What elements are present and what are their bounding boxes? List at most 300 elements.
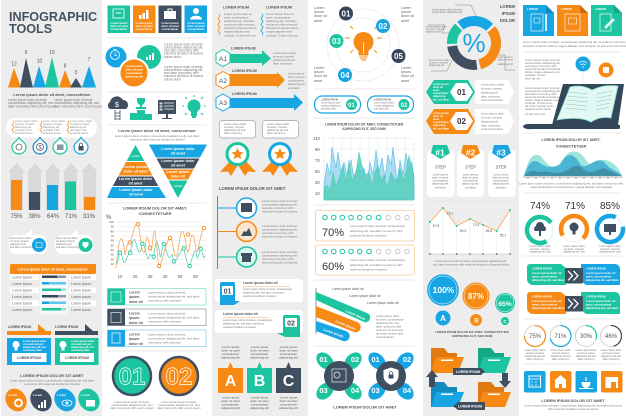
icon text cards: nonummy nibh euismod: [148, 340, 181, 344]
timeline with icons: Lorem ipsum dolor sit amet,: [262, 199, 298, 203]
numbered note cards: Lorem ipsum dolor sit: [223, 312, 259, 316]
hexagon arrows: consectetuer: [288, 78, 304, 82]
numbered circles: diam nonummy nibh Lorem ipsum: [157, 406, 201, 410]
wave chart: LOREM IPSUM DOLOR SIT AMET,: [541, 138, 601, 142]
white pill with text columns: euismod ipsum: [70, 131, 89, 135]
hexagon rows: Lorem ipsum: [433, 83, 449, 86]
percentage bubbles: 65%: [498, 301, 512, 308]
rating cards: [316, 210, 414, 275]
laptop with book: sed diam nonummy nibh: [525, 64, 557, 68]
hexagon arrows: diam nonummy: [273, 62, 293, 66]
table panel: Lorem ipsum: [71, 302, 91, 306]
squiggle text blocks: tincidunt ut laoreet dolore: [224, 26, 257, 30]
hexagon rows: adipiscing: [433, 95, 446, 98]
pill cards: LOREM IPSUM: [374, 98, 391, 102]
inverted pyramid: dolor sit: [171, 174, 186, 178]
percent donut: DOLOR: [500, 18, 515, 23]
hexagon rows: dolor sit: [433, 86, 443, 89]
diagonal ribbons: Lorem ipsum: [335, 319, 356, 331]
white pill with text columns: euismod ipsum: [43, 131, 62, 135]
bottom right heading: LOREM IPSUM DOLOR SIT AMET: [541, 398, 605, 403]
percent donut: Lorem ipsum dolor sit amet,: [432, 8, 463, 12]
squiggle text blocks: LOREM IPSUM: [266, 6, 292, 10]
icon text cards: [108, 288, 206, 346]
percent donut: consectetuer adipiscing elit: [432, 11, 462, 14]
hexagon rows: amet,: [433, 89, 440, 92]
line chart: 60: [193, 274, 198, 279]
hexagon rows: euismod tincidunt: [481, 98, 503, 102]
hexagon rows: 01: [457, 88, 466, 97]
hexagon arrows: dolor sit amet: [288, 75, 305, 79]
squiggle text blocks: volutpat. Ut wisi enim ad: [224, 34, 256, 38]
oval icons: [1, 384, 104, 416]
hexagon rows: diam nonummy: [481, 94, 501, 98]
ABC tiles: consectetuer: [251, 352, 269, 356]
banner boxes: LOREM IPSUM: [17, 356, 41, 360]
hexagon arrows: adipiscing elit sed: [273, 58, 296, 62]
numbered note cards: Lorem ipsum dolor sit amet, consectetuer: [223, 318, 272, 322]
table panel: Lorem ipsum: [12, 282, 32, 286]
percent donut: sit amet, consect: [429, 62, 448, 64]
timeline with icons: Lorem ipsum dolor sit amet,: [262, 224, 298, 228]
percentage donuts: sit amet, consect: [564, 247, 584, 251]
hexagon arrows: sed diam: [288, 86, 300, 90]
circle side text: euismod tincidunt ut laoreet: [164, 52, 203, 56]
hexagon rows: euismod tincidunt: [481, 127, 503, 131]
percent donut: %: [462, 28, 486, 58]
lightbulb radial diagram: 05: [394, 52, 403, 61]
pill cards: 01: [348, 103, 355, 109]
percent donut: Lorem ipsum dolor: [429, 59, 450, 62]
area chart: 110: [313, 136, 320, 141]
area chart: 30: [315, 180, 320, 185]
area chart: 90: [315, 147, 320, 152]
lightbulb radial diagram: dolor sit: [401, 74, 414, 78]
section text: nonummy nibh euismod tincidunt ut laoreet: [129, 138, 185, 142]
diagonal ribbons: sit amet, consectetuer: [376, 318, 403, 322]
hexagon arrows: A1: [219, 56, 227, 63]
icon text cards: dolor sit: [129, 342, 144, 346]
flow boxes: LOREM IPSUM: [532, 266, 552, 270]
hexagon arrows: [216, 46, 305, 111]
clover diagrams: 03: [371, 386, 380, 395]
clover diagrams: 01: [371, 355, 380, 364]
triangle chart: [8, 50, 96, 88]
numbered note cards: Lorem ipsum dolor sit: [243, 281, 279, 285]
banner boxes: sit amet consect: [71, 342, 91, 346]
line chart: 100: [109, 220, 114, 224]
table panel: Lorem ipsum: [71, 276, 91, 280]
hexagon rows: adipiscing elit: [481, 120, 498, 124]
laptop with book: Lorem ipsum dolor sit amet,: [525, 58, 561, 62]
pill cards: Lorem ipsum dolor: [321, 102, 341, 104]
bubbles and medals: [220, 120, 298, 176]
bubbles and medals: sit amet, consect: [224, 125, 244, 129]
percentage donuts: adipiscing elit, sed: [599, 250, 621, 254]
lightbulb radial diagram: Lorem: [401, 66, 411, 70]
progress rings: Lorem ipsum dolor: [576, 349, 597, 352]
numbered circles: [110, 357, 201, 410]
clover diagrams: 03: [319, 386, 328, 395]
folder cycle: LOREM IPSUM: [458, 404, 482, 408]
circle side text: consectetuer adipiscing elit,: [164, 68, 203, 72]
area chart: 10: [315, 191, 320, 196]
hexagon rows: adipiscing: [433, 124, 446, 127]
diagonal ribbons: adipiscing elit, sed: [376, 321, 399, 325]
timeline with icons: euismod tincidunt ut laoreet: [262, 234, 298, 238]
speech bubble callouts: sit amet consect: [10, 239, 29, 243]
bubbles and medals: sit amet, consect: [267, 125, 287, 129]
lightbulb radial diagram: 02: [379, 22, 388, 31]
oval icons: Lorem: [81, 393, 91, 397]
lightbulb radial diagram: amet: [401, 79, 409, 83]
step cards: #1: [435, 148, 445, 158]
triangle chart: 15: [49, 50, 55, 56]
stat tiles: dolor sit amet: [161, 24, 179, 28]
bottom right heading: [524, 398, 623, 411]
bottom right heading: Lorem ipsum dolor sit amet, consectetuer adipiscing elit, sed diam nonummy: [524, 404, 623, 408]
numbered note cards: 01: [224, 288, 231, 296]
ABC tiles: consectetuer: [280, 352, 298, 356]
pill cards: 02: [401, 103, 408, 109]
laptop with book: Ut wisi enim ad: [525, 112, 545, 116]
step cards: dolor sit amet,: [432, 176, 449, 180]
pyramid: Lorem ipsum dolor: [119, 177, 153, 181]
percent donut: adipiscing elit: [429, 64, 444, 67]
step cards: consectetuer: [433, 178, 448, 182]
banner boxes: LOREM IPSUM: [55, 325, 79, 329]
progress rings: sit amet consect: [526, 352, 544, 355]
icon text cards: dolor sit: [129, 321, 144, 325]
lightbulb radial diagram: ipsum: [401, 10, 411, 14]
laptop with book: enim ad min: [525, 76, 541, 80]
chart caption: consectetuer adipiscing elit, sed: [8, 101, 53, 105]
lightbulb radial diagram: amet: [314, 19, 322, 23]
step cards: adipiscing elit,: [493, 182, 510, 186]
arrow bar chart: 75%: [10, 214, 23, 220]
lightbulb radial diagram: [314, 6, 414, 83]
hexagon rows: adipiscing elit: [481, 90, 498, 94]
ABC tiles: consectetuer: [222, 352, 240, 356]
ABC tiles: C: [283, 373, 295, 390]
line chart: 50: [111, 243, 114, 247]
lightbulb radial diagram: ipsum: [314, 70, 324, 74]
percentage bubbles: C: [503, 319, 507, 324]
bubbles and medals: diam nonummy: [224, 131, 243, 135]
percent donut: Lorem ipsum: [498, 56, 512, 59]
percentage donuts: 85%: [600, 201, 620, 212]
squiggle text blocks: amet, consectetuer: [266, 16, 291, 20]
line chart: 90: [111, 225, 114, 229]
circle side text: dolore dolor: [164, 55, 182, 59]
overlapping circles: dolor sit amet: [125, 68, 143, 72]
clover diagrams: 02: [403, 355, 411, 364]
step cards: #3: [496, 148, 506, 158]
timeline with icons: consectetuer adipiscing elit,: [262, 228, 298, 232]
hexagon rows: diam nonummy: [481, 124, 501, 128]
ABC tiles: adipiscing elit: [279, 406, 298, 410]
speech bubble callouts: Lorem ipsum dolor: [56, 236, 78, 240]
line area chart: sed diam nonummy nibh euismod tincidunt ut laoreet dolore: [433, 262, 510, 266]
speech bubble callouts: Lorem ipsum dolor: [10, 236, 32, 240]
rating cards: adipiscing elit, sed diam nonummy nibh: [350, 229, 403, 233]
arrow bar chart: 38%: [28, 214, 41, 220]
rating cards: adipiscing elit, sed diam nonummy nibh: [350, 263, 403, 267]
percentage donuts: sit amet, consect: [530, 247, 550, 251]
hexagon rows: elit, sed diam: [433, 98, 450, 102]
icon text cards: nonummy nibh euismod: [148, 320, 181, 324]
laptop with book: Lorem ipsum dolor sit amet,: [525, 86, 561, 90]
icon text cards: Lorem: [129, 312, 140, 316]
stat tiles: consectetuer: [188, 27, 204, 31]
percent donut: [426, 4, 516, 71]
pill cards: sed diam nibh: [321, 108, 337, 110]
progress rings: Lorem ipsum dolor: [525, 349, 546, 352]
percent donut: Lorem ipsum dolor: [426, 26, 447, 28]
stat tiles: Lorem ipsum: [136, 21, 153, 25]
inverted pyramid: Lorem ipsum dolor: [161, 159, 195, 163]
table panel: Lorem ipsum: [12, 302, 32, 306]
line chart: 40: [111, 248, 114, 252]
chart caption: [8, 92, 102, 108]
squiggle text blocks: volutpat. Ut wisi enim ad: [266, 34, 298, 38]
pill cards: sed diam nibh: [374, 108, 390, 110]
circle side text: consectetuer adipiscing elit,: [164, 46, 203, 50]
hexagon arrows: LOREM IPSUM: [232, 92, 257, 96]
diagonal ribbons: [316, 287, 404, 341]
hexagon rows: 02: [457, 117, 466, 126]
pyramid: Lorem ipsum: [124, 165, 148, 169]
squiggle text blocks: amet, consectetuer: [224, 16, 249, 20]
overlapping circles: adipiscing elit: [125, 74, 143, 78]
pill cards: LOREM IPSUM: [321, 98, 338, 102]
line chart: 20: [111, 257, 114, 261]
banner boxes: [7, 324, 98, 365]
step cards: adipiscing elit,: [462, 182, 479, 186]
line area chart: 59,3: [460, 229, 466, 233]
table panel: [10, 264, 96, 314]
area chart: LOREM IPSUM DOLOR SIT AMET, CONSECTETUER: [325, 122, 404, 126]
triangle chart: 8: [64, 64, 67, 70]
lightbulb radial diagram: ipsum: [314, 10, 324, 14]
percentage bubbles: ADIPISCING ELIT, SED DIAM: [452, 334, 493, 338]
lightbulb radial diagram: Lorem: [314, 6, 324, 10]
percentage bubbles: LOREM IPSUM DOLOR SIT AMET, CONSECTETUER: [435, 330, 510, 334]
line chart: 70: [111, 234, 114, 238]
numbered circles: 01: [119, 364, 145, 390]
timeline with icons: euismod tincidunt ut laoreet: [262, 260, 298, 264]
table panel: Lorem ipsum: [12, 308, 32, 312]
icon text cards: Lorem ipsum dolor sit amet,: [148, 290, 186, 294]
line chart: [106, 206, 206, 279]
numbered note cards: Lorem ipsum dolor sit amet, consectetuer: [243, 287, 292, 291]
squiggle text blocks: LOREM IPSUM: [223, 6, 249, 10]
laptop with book: nostrud exerci tation: [525, 107, 551, 111]
table panel: Lorem ipsum dolor sit amet, consectetuer: [18, 268, 88, 272]
speech bubble callouts: adipiscing elit: [10, 242, 26, 246]
percentage donuts: adipiscing elit, sed: [529, 250, 551, 254]
circle side text: euismod tincidunt ut laoreet: [164, 74, 203, 78]
numbered circles: consectetuer adipiscing elit, sed: [112, 403, 153, 407]
clover diagrams: 01: [319, 355, 328, 364]
line area chart: 79,1: [447, 212, 453, 216]
icon text cards: ipsum: [129, 316, 139, 320]
ABC tiles: adipiscing elit: [221, 356, 240, 360]
timeline with icons: Lorem ipsum dolor sit amet,: [262, 250, 298, 254]
banner boxes: adipiscing elit sed: [23, 345, 46, 349]
flow boxes: Lorem ipsum dolor sit: [532, 299, 561, 303]
table panel: Lorem ipsum: [71, 308, 91, 312]
step cards: STEP: [435, 164, 446, 170]
hexagon rows: amet,: [433, 118, 440, 121]
line area chart: 65,8: [486, 229, 492, 233]
squiggle text blocks: Lorem ipsum dolor sit: [266, 12, 294, 16]
pyramid: sit amet: [129, 182, 143, 186]
percentage donuts: Lorem ipsum dolor: [599, 244, 621, 248]
chart caption: diam nonummy nibh Lorem ipsum: [8, 104, 56, 108]
step cards: sed diam: [496, 186, 507, 190]
percentage donuts: Lorem ipsum dolor: [563, 244, 585, 248]
diagonal ribbons: ad minim veniam quis: [376, 332, 404, 336]
ABC tiles: adipiscing elit: [250, 356, 269, 360]
line chart: 30: [148, 274, 153, 279]
icon text cards: dolor sit: [129, 300, 144, 304]
circle side text: sed diam nonummy nibh: [164, 48, 199, 52]
white pill with text columns: sed diam nibh: [70, 128, 87, 132]
white pill with text columns: adipiscing elit: [70, 125, 86, 129]
progress rings: 46%: [605, 334, 618, 340]
line area chart: 55,1: [500, 234, 506, 238]
step cards: dolor sit amet,: [462, 176, 479, 180]
triangle chart: 12: [11, 62, 17, 68]
clover diagrams: 04: [403, 386, 412, 395]
flow boxes: adipiscing elit, sed diam: [532, 306, 565, 310]
banner boxes: nonummy nibh: [71, 348, 90, 352]
flow boxes: Lorem ipsum dolor sit: [532, 271, 561, 275]
line area chart: 72,9: [473, 223, 479, 227]
numbered note cards: euismod tincidunt ut laoreet: [223, 325, 256, 329]
progress rings: diam nonummy: [552, 358, 570, 361]
ABC tiles: Lorem ipsum: [251, 396, 269, 400]
ABC tiles: dolor sit amet: [279, 399, 298, 403]
line chart: 80: [111, 229, 114, 233]
ABC tiles: adipiscing elit: [221, 406, 240, 410]
ABC tiles: Lorem ipsum: [280, 396, 298, 400]
percentage donuts: adipiscing elit, sed: [563, 250, 585, 254]
diagonal ribbons: diam nonummy nibh: [376, 324, 402, 328]
pill cards: consect adipiscing: [321, 104, 341, 108]
timeline with icons: sed diam nonummy nibh: [262, 206, 294, 210]
rating cards: Lorem ipsum dolor sit amet, consectetuer: [350, 224, 405, 228]
clover diagrams: 02: [351, 355, 359, 364]
icon text cards: nonummy nibh euismod: [148, 298, 181, 302]
step cards: STEP: [465, 164, 476, 170]
pyramid: sit amet: [129, 192, 144, 196]
hexagon arrows: sit amet, consect: [273, 54, 294, 58]
overlapping circles: Lorem ipsum: [126, 64, 143, 68]
diagonal ribbons: Lorem ipsum dolor sit: [349, 294, 381, 298]
percentage bubbles: 100%: [433, 285, 455, 295]
percent donut: IPSUM: [502, 11, 516, 16]
ABC tiles: consectetuer: [280, 402, 298, 406]
stat tiles: Lorem ipsum: [111, 21, 128, 25]
squiggle text blocks: Lorem ipsum dolor sit: [224, 12, 252, 16]
percentage donuts: 71%: [565, 201, 585, 212]
bubbles and medals: diam nonummy: [267, 131, 286, 135]
stat tiles: dolor sit amet: [135, 24, 153, 28]
step cards: sed diam: [465, 186, 477, 190]
inverted pyramid: sit amet: [171, 164, 186, 168]
step cards: Lorem ipsum: [433, 172, 449, 176]
progress rings: 75%: [529, 334, 542, 340]
inverted pyramid: Lorem: [174, 184, 183, 188]
progress rings: diam nonummy: [526, 358, 544, 361]
line chart: 60: [111, 239, 114, 243]
white pill with text columns: Lorem ipsum dolor: [15, 119, 37, 123]
bubbles and medals: Lorem ipsum dolor: [224, 122, 246, 126]
bubbles and medals: adipiscing elit sed: [224, 128, 246, 132]
icon text cards: Lorem ipsum dolor sit amet,: [148, 312, 186, 316]
chart caption: Lorem ipsum dolor sit amet, consectetuer: [13, 92, 91, 97]
lightbulb radial diagram: 03: [332, 37, 341, 46]
lightbulb radial diagram: ipsum: [401, 70, 411, 74]
bottom left heading: [10, 373, 95, 386]
banner boxes: nonummy nibh: [23, 348, 42, 352]
laptop with book: euismod tincidunt ut laoreet: [525, 95, 561, 99]
line chart: 10: [111, 262, 114, 266]
step cards: adipiscing elit,: [432, 182, 449, 186]
pyramid: Lorem ipsum dolor: [119, 188, 153, 192]
title: [9, 10, 97, 36]
overlapping circles: consectetuer: [126, 71, 142, 75]
white pill with text columns: Lorem ipsum dolor: [43, 119, 65, 123]
numbered circles: Lorem ipsum dolor sit amet,: [161, 400, 197, 404]
hexagon rows: consectetuer: [433, 121, 449, 124]
percentage donuts: sit amet, consect: [600, 247, 620, 251]
triangle chart: 10: [37, 58, 42, 64]
flow boxes: amet, consectetuer: [586, 274, 612, 278]
pyramid: [107, 145, 166, 198]
area chart: 70: [315, 158, 320, 163]
step cards: consectetuer: [493, 178, 509, 182]
percent donut: LOREM: [500, 4, 516, 9]
oval icons: Lorem: [57, 393, 67, 397]
rating cards: euismod tincidunt ut laoreet: [350, 268, 387, 272]
hexagon arrows: A3: [219, 100, 227, 107]
arrow bar chart: 31%: [83, 214, 96, 220]
rating cards: 60%: [322, 261, 344, 273]
flow boxes: LOREM IPSUM: [586, 266, 606, 270]
timeline with icons: [218, 186, 298, 269]
white pill with text columns: sed diam nibh: [15, 128, 32, 132]
laptop with book: consectetuer adipiscing elit,: [525, 61, 561, 65]
laptop with book: ad minim veniam quis: [525, 104, 554, 108]
bottom left heading: LOREM IPSUM DOLOR SIT AMET: [20, 373, 84, 378]
white pill with text columns: Lorem ipsum dolor: [70, 119, 92, 123]
oval icons: Lorem: [8, 393, 18, 397]
icon text cards: ipsum: [129, 295, 139, 299]
laptop with book: [523, 56, 624, 129]
percentage bubbles: 87%: [468, 292, 484, 301]
pill cards: [314, 96, 414, 113]
laptop with book: volutpat. Ut wisi: [525, 73, 546, 77]
banner boxes: adipiscing elit sed: [71, 345, 94, 349]
bottom left heading: nonummy nibh euismod tincidunt ut laoreet: [24, 382, 80, 386]
flow boxes: Lorem ipsum dolor sit: [586, 271, 615, 275]
arrow bar chart: [8, 163, 98, 220]
progress rings: diam nonummy: [602, 358, 620, 361]
wave chart: Lorem ipsum dolor sit amet, consectetuer adipiscing elit, sed diam nonummy nibh: [519, 182, 624, 186]
